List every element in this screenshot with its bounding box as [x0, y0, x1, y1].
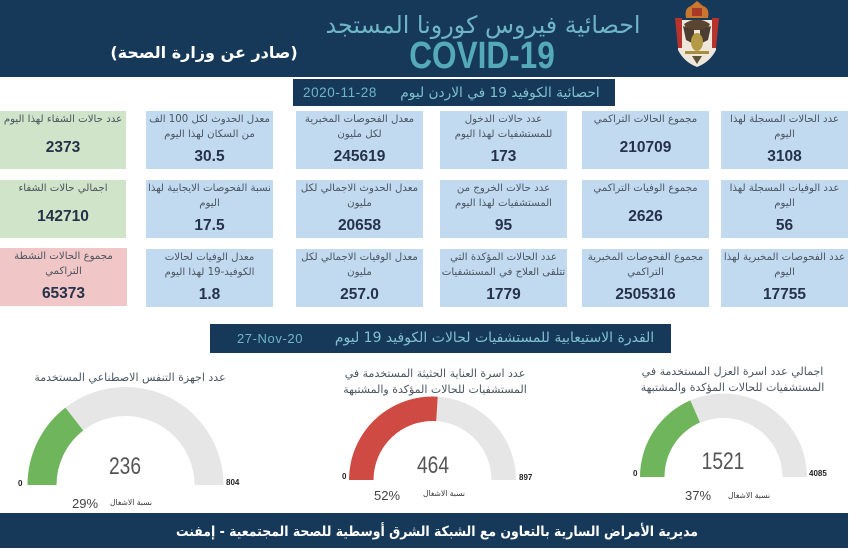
card: total recoveries: اجمالي حالات الشفاء [18, 183, 108, 194]
card: total recoveries: 142710 [37, 208, 89, 225]
gauge heading: المستشفيات للحالات المؤكدة والمشتبهة [641, 380, 824, 394]
card: cumulative tests [582, 249, 709, 307]
card: incidence per 100k [146, 111, 273, 169]
card: positive test rate: اليوم [199, 198, 220, 208]
gauge heading: اجمالي عدد اسرة العزل المستخدمة في [642, 365, 823, 378]
gauge heading: عدد اجهزة التنفس الاصطناعي المستخدمة [34, 371, 226, 384]
card: cumulative deaths [582, 180, 709, 238]
card: hospital admissions: للمستشفيات لهذا اليوم [455, 128, 552, 140]
occupancy label: نسبة الاشغال [110, 498, 152, 507]
occupancy percent: 37% [685, 488, 711, 503]
card: confirmed cases in hospital: 1779 [486, 286, 521, 303]
card: tests per million: لكل مليون [337, 128, 382, 140]
card: cumulative tests: مجموع الفحوصات المخبرية [588, 252, 703, 263]
gauge heading [641, 365, 824, 394]
gauge max: 4085 [809, 469, 827, 478]
card: positive test rate: 17.5 [194, 217, 225, 234]
title: Arabic heading: احصائية فيروس كورونا المستجد [325, 11, 641, 39]
occupancy label: نسبة الاشغال [728, 491, 770, 500]
card: cumulative deaths: مجموع الوفيات التراكمي [593, 183, 698, 194]
card: active cases: 65373 [42, 285, 85, 302]
card: daily cases: 3108 [767, 148, 802, 165]
card: total incidence per million: مليون [347, 198, 372, 208]
gauge max: 897 [519, 473, 532, 482]
subtitle: issued by Ministry of Health: (صادر عن وزارة الصحة) [110, 43, 298, 62]
card: cumulative tests: التراكمي [627, 266, 664, 278]
card: confirmed cases in hospital: تتلقى العلاج في المستشفيات [442, 266, 565, 278]
card: active cases: مجموع الحالات النشطة [14, 251, 113, 262]
card: tests per million [296, 111, 423, 169]
card: daily tests: عدد الفحوصات المخبرية لهذا [724, 252, 845, 263]
card: daily cases: عدد الحالات المسجلة لهذا [730, 114, 839, 125]
card: incidence per 100k: من السكان لهذا اليوم [164, 128, 255, 140]
card: hospital discharges: عدد حالات الخروج من [457, 183, 550, 194]
card: hospital discharges [440, 180, 567, 238]
card: daily cases [721, 111, 848, 169]
card: daily tests: 17755 [763, 286, 806, 303]
card: tests per million: 245619 [334, 148, 385, 165]
card: daily deaths: 56 [776, 217, 793, 234]
gauge chart [349, 396, 516, 480]
card: total deaths per million: معدل الوفيات الاجمالي لكل [301, 252, 418, 263]
gauge heading [343, 367, 527, 396]
gauge min: 0 [18, 479, 22, 488]
gauge value: 1521 [702, 448, 744, 475]
card: hospital discharges: 95 [495, 217, 512, 234]
card: cumulative cases: 210709 [620, 139, 671, 156]
card: active cases [0, 248, 127, 306]
card: daily tests [721, 249, 848, 307]
card: confirmed cases in hospital: عدد الحالات المؤكدة التي [450, 252, 557, 263]
gauge min: 0 [342, 472, 346, 481]
banner date: 2020-11-28 [303, 85, 377, 100]
title: COVID-19: COVID-19 [409, 35, 555, 77]
occupancy percent: 29% [72, 496, 98, 511]
card: daily death rate: معدل الوفيات لحالات [165, 252, 254, 263]
footer text: مديرية الأمراض السارية بالتعاون مع الشبكة الشرق أوسطية للصحة المجتمعية - إمفنت [176, 524, 698, 540]
gauge panel: ventilators [18, 371, 240, 511]
card: total deaths per million: 257.0 [340, 286, 379, 303]
gauge value: 464 [417, 452, 449, 479]
gauge heading: المستشفيات للحالات المؤكدة والمشتبهة [343, 382, 527, 396]
gauge max: 804 [226, 478, 239, 487]
card: cumulative deaths: 2626 [628, 208, 663, 225]
card: daily recoveries [0, 111, 126, 169]
card: daily death rate: 1.8 [199, 286, 220, 303]
gauge chart [640, 394, 807, 477]
card: daily cases: اليوم [774, 128, 795, 140]
gauge chart [28, 387, 224, 485]
card: daily deaths [721, 180, 848, 238]
card: hospital admissions: عدد حالات الدخول [465, 114, 542, 125]
gauge heading: عدد اسرة العناية الحثيثة المستخدمة في [345, 367, 525, 380]
card: incidence per 100k: 30.5 [194, 148, 225, 165]
section banner: hospital capacity [210, 324, 671, 353]
card: positive test rate [146, 180, 273, 238]
card: total incidence per million: معدل الحدوث الاجمالي لكل [301, 183, 418, 194]
card: total recoveries [0, 180, 126, 238]
footer band [0, 513, 848, 548]
card: total deaths per million: مليون [347, 266, 372, 278]
card: total incidence per million [296, 180, 423, 238]
date banner [293, 79, 615, 106]
card: hospital discharges: المستشفيات لهذا اليوم [455, 198, 552, 208]
card: daily deaths: اليوم [774, 198, 795, 208]
card: daily deaths: عدد الوفيات المسجلة لهذا [730, 183, 839, 194]
card: total deaths per million [296, 249, 423, 307]
gauge value: 236 [109, 453, 141, 480]
card: total incidence per million: 20658 [338, 217, 381, 234]
card: daily tests: اليوم [774, 266, 795, 278]
card: cumulative cases [582, 111, 709, 169]
banner text: capacity heading: القدرة الاستيعابية للمستشفيات لحالات الكوفيد 19 ليوم [335, 330, 654, 346]
occupancy percent: 52% [374, 488, 400, 503]
card: cumulative cases: مجموع الحالات التراكمي [594, 114, 697, 125]
card: cumulative tests: 2505316 [615, 286, 676, 303]
gauge panel: isolation beds [633, 365, 827, 503]
card: hospital admissions [440, 111, 567, 169]
occupancy label: نسبة الاشغال [423, 489, 465, 498]
card: daily death rate: الكوفيد-19 لهذا اليوم [165, 266, 254, 278]
card: daily recoveries: عدد حالات الشفاء لهذا اليوم [4, 114, 122, 125]
header band [0, 0, 848, 77]
card: incidence per 100k: معدل الحدوث لكل 100 الف [149, 114, 270, 125]
gauge min: 0 [633, 469, 637, 478]
banner date: 27-Nov-20 [237, 331, 303, 346]
card: positive test rate: نسبة الفحوصات الايجابية لهذا [148, 183, 271, 194]
gauge panel: ICU beds [342, 367, 532, 503]
card: daily death rate [146, 249, 273, 307]
card: tests per million: معدل الفحوصات المخبرية [305, 114, 414, 125]
icon: Jordan coat of arms [675, 1, 719, 67]
card: active cases: التراكمي [45, 266, 82, 276]
banner text: statistics in Jordan: احصائية الكوفيد 19 في الاردن ليوم [400, 85, 600, 101]
card: hospital admissions: 173 [491, 148, 516, 165]
card: confirmed cases in hospital [440, 249, 567, 307]
card: daily recoveries: 2373 [46, 139, 80, 156]
